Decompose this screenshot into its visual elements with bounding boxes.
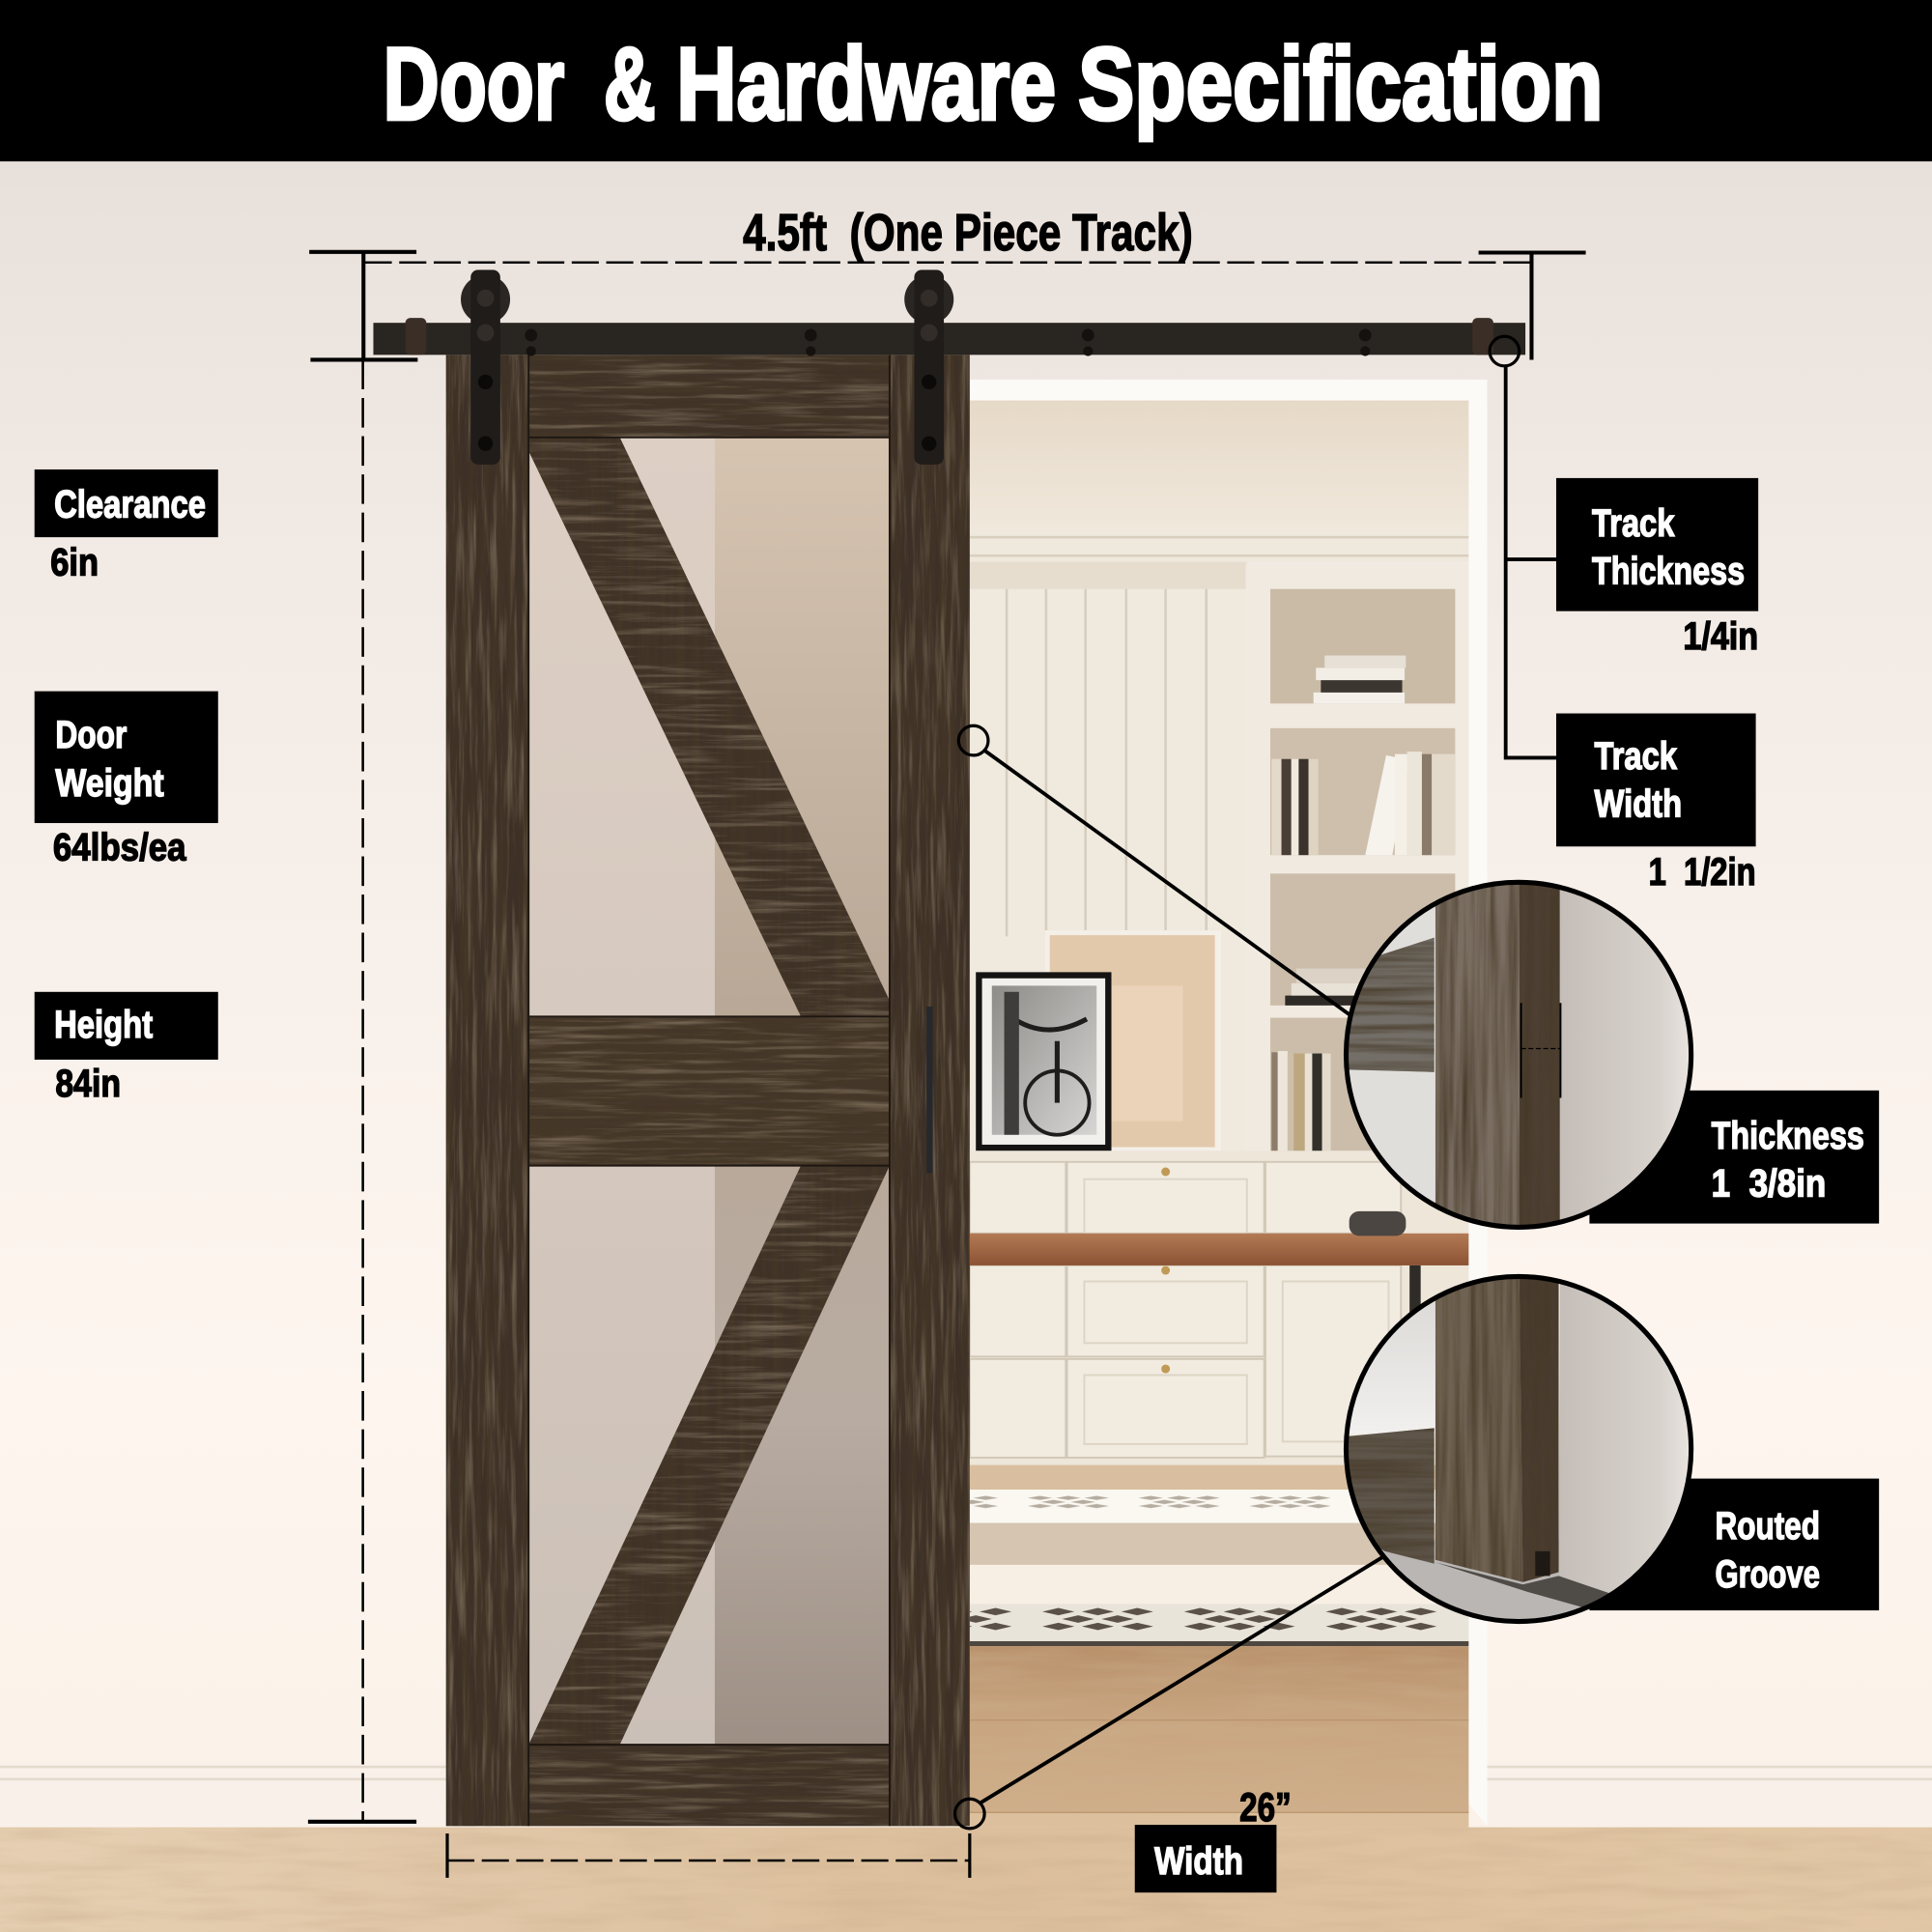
track stoppers — [406, 318, 1493, 355]
thickness label box: 1 3/8in — [1712, 1163, 1826, 1206]
stile face — [1435, 880, 1520, 1230]
panelled wall — [970, 562, 1247, 1153]
track width label — [1556, 714, 1756, 894]
right hanger strap — [904, 270, 953, 465]
left stile — [446, 355, 528, 1826]
door handle — [926, 1007, 933, 1173]
rug with sunlight — [970, 1490, 1468, 1646]
title — [384, 26, 1603, 142]
bookcase — [1246, 564, 1468, 1153]
door weight label: Door — [55, 714, 127, 756]
sliding track — [373, 318, 1525, 356]
crown molding — [970, 532, 1468, 562]
groove notch — [1535, 1551, 1550, 1576]
title: Hardware — [676, 26, 1056, 142]
routed groove label box: Routed — [1716, 1505, 1820, 1548]
title: Specification — [1078, 26, 1603, 142]
room wood floor — [970, 1646, 1468, 1828]
track thickness label: Thickness — [1592, 551, 1745, 593]
width label: Width — [1154, 1840, 1243, 1883]
door weight label: 64lbs/ea — [53, 826, 186, 868]
track width label: 1 1/2in — [1649, 851, 1756, 894]
thickness label box: Thickness — [1712, 1115, 1864, 1157]
track length label: 4.5ft (One Piece Track) — [743, 205, 1193, 262]
stile edge — [1520, 880, 1560, 1230]
width dimension — [447, 1833, 970, 1878]
routed groove label box — [1589, 1479, 1879, 1610]
door frame trim — [970, 380, 1488, 1826]
width label — [1135, 1825, 1276, 1892]
books on fourth shelf — [1271, 1051, 1331, 1151]
height label — [35, 992, 218, 1105]
room ceiling — [970, 401, 1468, 532]
books on top shelf — [1314, 656, 1406, 703]
stile face — [1435, 1274, 1523, 1582]
track width label: Track — [1595, 735, 1678, 778]
door thickness leader — [958, 725, 1350, 1015]
zoom circle: routed groove — [1343, 1274, 1700, 1633]
zoom circle: door thickness — [1343, 880, 1695, 1230]
track thickness label — [1556, 478, 1758, 658]
room floor strip — [970, 1465, 1468, 1490]
26 inch value: 26” — [1239, 1784, 1292, 1830]
baseboard — [0, 1762, 1932, 1829]
barn door — [446, 355, 970, 1826]
clearance label: Clearance — [54, 484, 206, 526]
header bar — [0, 0, 1932, 161]
bowl on table — [1350, 1211, 1406, 1236]
middle rail — [528, 1016, 890, 1166]
books on third shelf — [1285, 969, 1372, 1006]
left hanger strap — [461, 270, 510, 465]
height dashed line — [362, 359, 364, 1821]
lower diagonal brace — [528, 1166, 890, 1745]
height label: Height — [54, 1004, 153, 1046]
top rail — [528, 355, 890, 438]
wooden table top — [970, 1234, 1468, 1265]
beige framed art — [1045, 930, 1221, 1151]
door weight label — [35, 692, 218, 868]
floor — [0, 1828, 1932, 1932]
title: Door — [384, 26, 564, 142]
right stile — [890, 355, 970, 1826]
door seams — [528, 355, 890, 1826]
track leader lines — [1490, 336, 1556, 757]
lower panel — [1343, 1428, 1435, 1564]
track thickness label: Track — [1592, 502, 1675, 545]
panel edge — [1343, 938, 1435, 1072]
doorway room view — [970, 401, 1468, 1828]
thickness marker — [1521, 1003, 1560, 1097]
clearance label: 6in — [50, 542, 99, 584]
track thickness label: 1/4in — [1683, 615, 1758, 658]
frosted glass — [528, 438, 890, 1745]
track bolts — [525, 329, 1372, 356]
stile edge — [1520, 1274, 1559, 1582]
upper diagonal brace — [528, 438, 890, 1016]
cabinets — [970, 1151, 1468, 1465]
clearance label — [35, 469, 218, 584]
track width label: Width — [1595, 783, 1682, 826]
height label: 84in — [55, 1063, 121, 1105]
floor — [1381, 1540, 1608, 1619]
wall — [1559, 1284, 1689, 1593]
books on second shelf — [1271, 752, 1455, 855]
black framed bicycle photo — [976, 972, 1112, 1151]
door bottom leader — [955, 1555, 1386, 1829]
title: & — [604, 26, 656, 142]
bottom rail — [528, 1745, 890, 1826]
routed groove label box: Groove — [1716, 1553, 1820, 1596]
floor shadow — [1435, 1562, 1613, 1609]
thickness label box — [1589, 1091, 1879, 1224]
door weight label: Weight — [55, 762, 164, 805]
